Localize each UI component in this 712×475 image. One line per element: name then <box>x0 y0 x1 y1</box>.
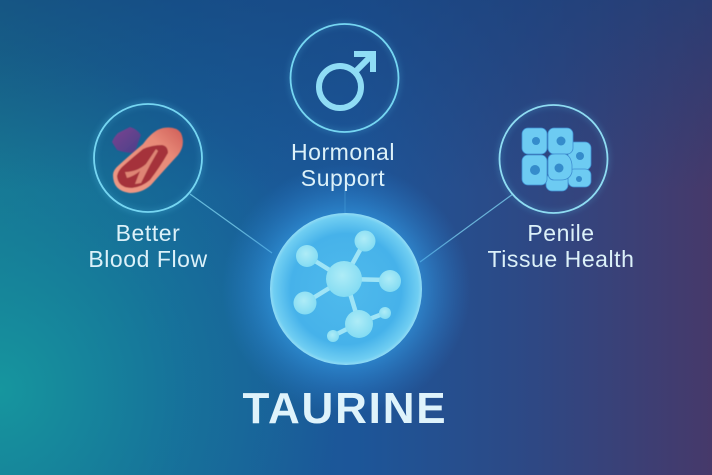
icon: blood vessel <box>113 128 183 193</box>
label: better blood flow <box>88 220 208 272</box>
label: hormonal support: Hormonal <box>291 139 395 165</box>
label: penile tissue health: Tissue Health <box>488 246 634 272</box>
icon circle: blood flow <box>94 104 202 212</box>
label: penile tissue health: Penile <box>527 220 595 246</box>
icon circle: penile tissue health <box>500 105 608 213</box>
icon circle: hormonal support <box>290 24 398 132</box>
label: penile tissue health <box>488 220 634 272</box>
connector lines <box>190 190 513 262</box>
label: better blood flow: Better <box>116 220 180 246</box>
label: better blood flow: Blood Flow <box>88 246 208 272</box>
icon: tissue cells <box>522 128 591 191</box>
label: hormonal support <box>291 139 395 191</box>
central sphere <box>221 164 471 414</box>
label: hormonal support: Support <box>301 164 385 190</box>
icon: purple tissue block <box>112 127 141 153</box>
icon: molecule <box>294 230 401 342</box>
icon: male symbol <box>319 54 373 108</box>
title: TAURINE <box>243 384 447 433</box>
